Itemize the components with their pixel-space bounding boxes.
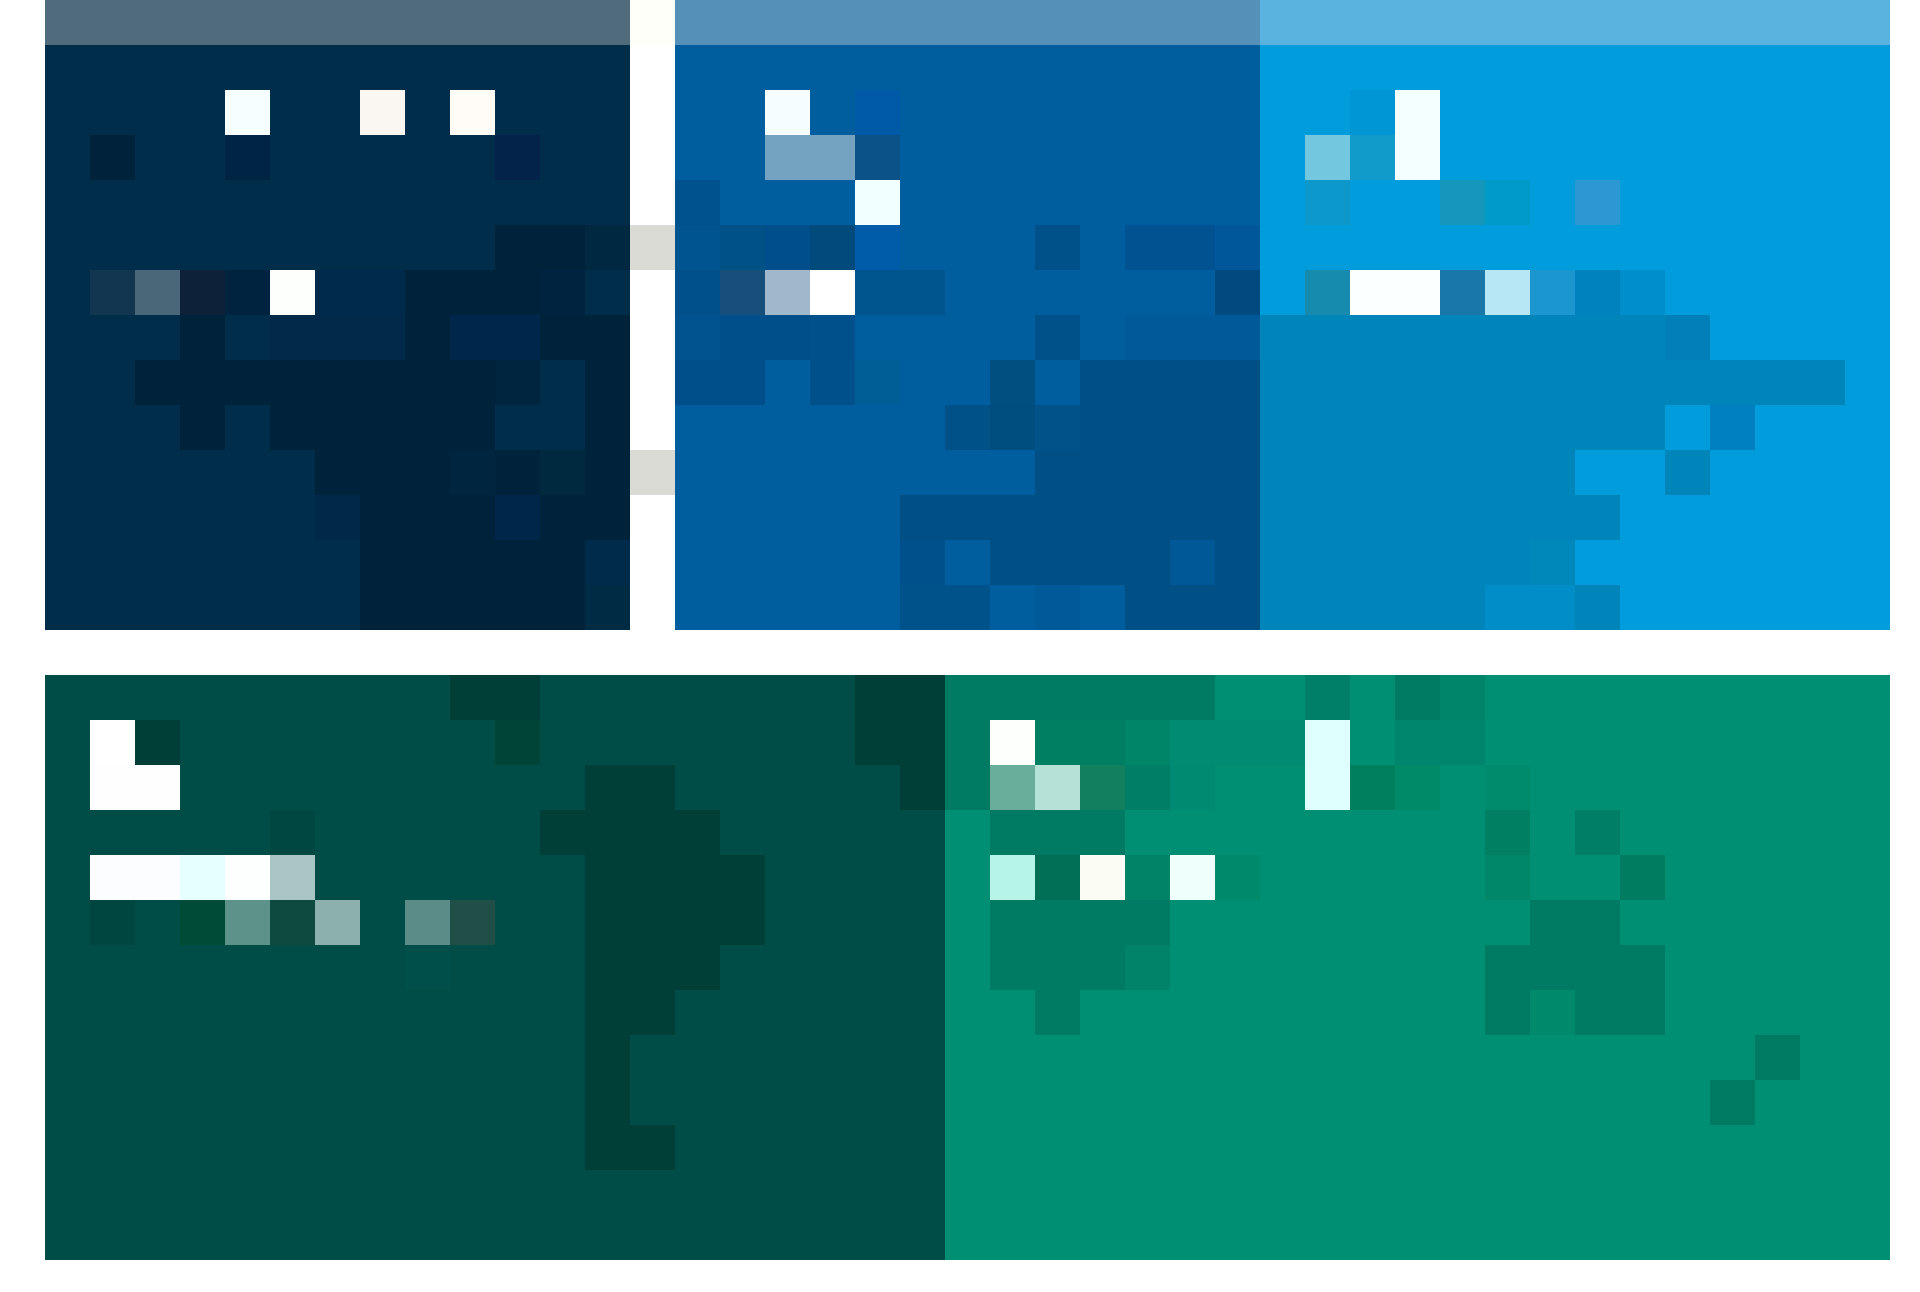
- bright blue panel pixelated text blocks: [1305, 90, 1665, 315]
- panel: navy: [45, 0, 630, 630]
- green teal panel pixelated text blocks: [990, 720, 1350, 900]
- mid blue panel pixelated text blocks: [765, 90, 900, 315]
- bright blue panel header band: [1260, 0, 1890, 45]
- navy panel pixelated text blocks: [90, 90, 495, 315]
- bright blue panel shading: [1260, 90, 1845, 630]
- mid blue panel shading: [675, 90, 1260, 630]
- green teal panel shading: [945, 675, 1800, 1125]
- panel: dark teal: [45, 675, 945, 1260]
- gutter marks between panels: [630, 0, 675, 495]
- panel: green teal: [945, 675, 1890, 1260]
- navy panel header band: [45, 0, 630, 45]
- mid blue panel header band: [675, 0, 1260, 45]
- panel: bright blue: [1260, 0, 1890, 630]
- panel: mid blue: [675, 0, 1260, 630]
- dark teal panel pixelated text blocks: [90, 720, 495, 945]
- dark teal panel shading: [135, 675, 945, 1170]
- navy panel shading: [90, 135, 630, 630]
